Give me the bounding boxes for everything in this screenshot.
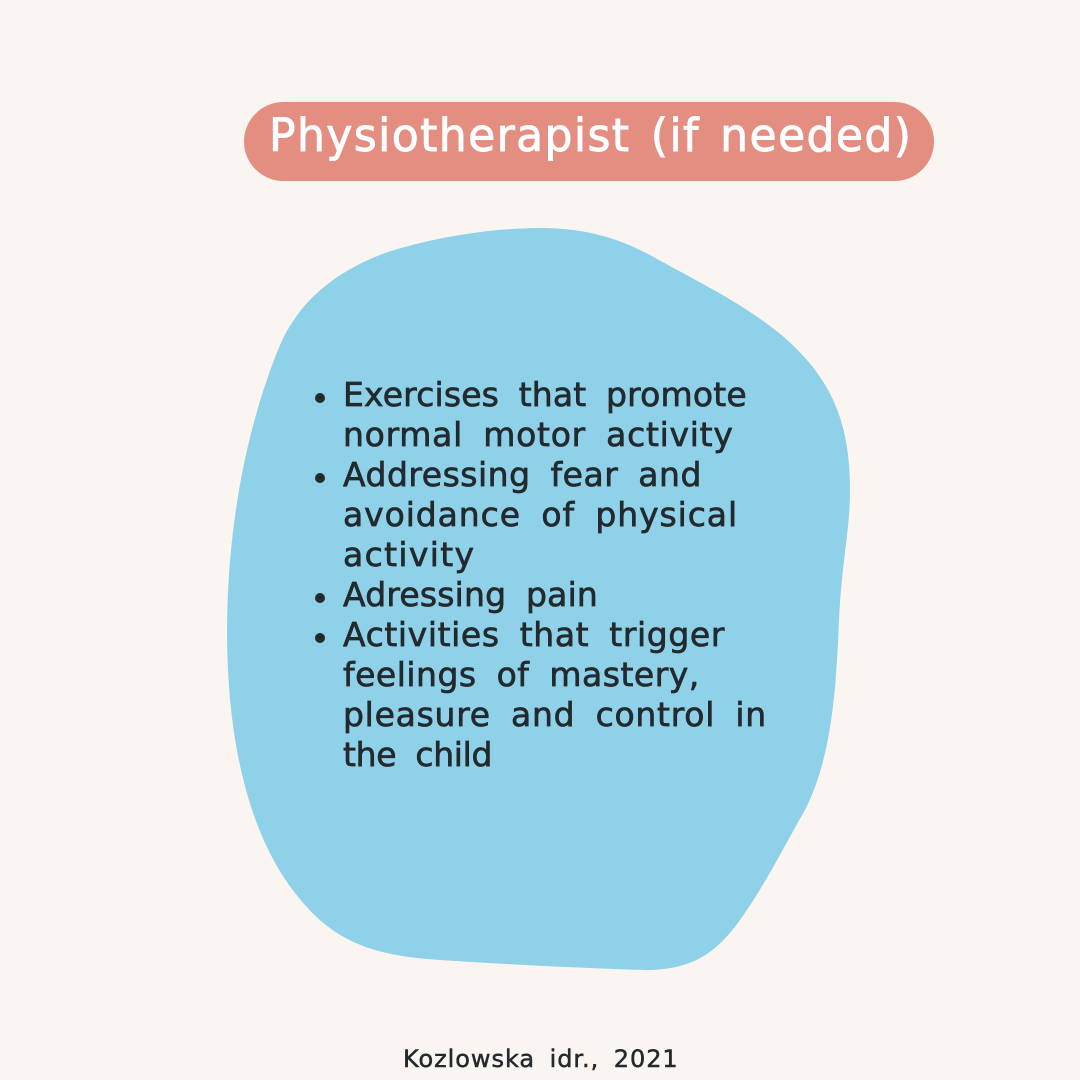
bullet: activities — [315, 615, 767, 774]
title text: Physiotherapist (if needed) — [269, 109, 912, 162]
bullet: activities: pleasure and control in — [343, 695, 767, 734]
bullet: fear and avoidance: activity — [343, 535, 475, 574]
bullet: fear and avoidance: avoidance of physical — [343, 495, 738, 534]
bullet: activities: feelings of mastery, — [343, 655, 700, 694]
citation: Kozlowska idr., 2021 — [403, 1045, 679, 1073]
bullet: pain: Adressing pain — [343, 575, 598, 614]
bullet: exercises — [315, 375, 747, 454]
bullet: exercises: normal motor activity — [343, 415, 734, 454]
title pill — [244, 102, 934, 181]
bullet list — [315, 375, 767, 774]
bullet: exercises: Exercises that promote — [343, 375, 747, 414]
bullet: fear and avoidance: Addressing fear and — [343, 455, 702, 494]
bullet: activities: Activities that trigger — [343, 615, 725, 654]
bullet: activities: the child — [343, 735, 492, 774]
bullet: fear and avoidance — [315, 455, 738, 574]
